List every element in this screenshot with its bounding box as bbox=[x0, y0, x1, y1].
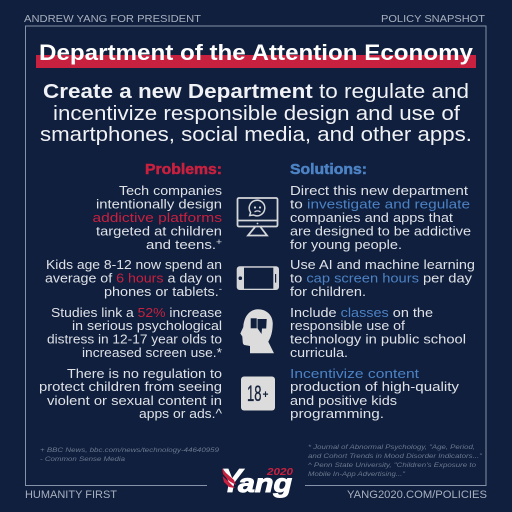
intro statement: Create a new Department to regulate and bbox=[43, 80, 469, 103]
logo: Yang 2020 bbox=[221, 462, 293, 499]
problem: addictive platforms: targeted at children bbox=[96, 224, 222, 238]
problem: psychological distress: in serious psychological bbox=[72, 318, 222, 333]
solution: investigate and regulate bbox=[290, 183, 471, 252]
solution: investigate and regulate: Direct this new department bbox=[290, 183, 468, 198]
problem: no regulation: violent or sexual content in bbox=[47, 393, 222, 408]
footnotes: right bbox=[308, 444, 483, 478]
header: campaign name: ANDREW YANG FOR PRESIDENT bbox=[24, 14, 201, 25]
problem: no regulation: apps or ads.^ bbox=[139, 406, 223, 421]
panel: problems bbox=[39, 162, 223, 421]
problem: six hours: phones or tablets. bbox=[104, 284, 209, 299]
panel: solutions bbox=[290, 162, 475, 421]
solution: investigate and regulate: to investigate and regulate bbox=[290, 196, 470, 212]
solution: cap screen hours: for children. bbox=[290, 284, 366, 299]
solution: cap screen hours: to cap screen hours per day bbox=[290, 270, 472, 286]
solution: investigate and regulate: for young people. bbox=[290, 237, 402, 252]
problem: psychological distress bbox=[47, 305, 222, 360]
icon: head with thumbs down bbox=[240, 309, 274, 353]
icon: 18+ rating bbox=[241, 376, 275, 410]
solution: investigate and regulate: companies and apps that bbox=[290, 210, 453, 225]
footnotes: right: and Cohort Trends in Mood Disorder Indicators..." bbox=[308, 453, 483, 460]
problem: addictive platforms: Tech companies bbox=[119, 183, 222, 198]
header: policy snapshot: POLICY SNAPSHOT bbox=[381, 14, 485, 25]
solution: classes: technology in public school bbox=[290, 332, 466, 346]
problem: six hours: average of 6 hours a day on bbox=[45, 270, 222, 286]
footnotes: right: * Journal of Abnormal Psychology, "Age, Period, bbox=[308, 444, 475, 451]
problem: psychological distress: increased screen use.* bbox=[82, 345, 222, 360]
title: Department of the Attention Economy bbox=[39, 40, 474, 65]
problem: psychological distress: Studies link a 52% increase bbox=[51, 305, 222, 320]
heading: problems: Problems: bbox=[145, 162, 222, 178]
solution: incentivize content: Incentivize content bbox=[290, 366, 419, 381]
problem: addictive platforms: addictive platforms bbox=[92, 210, 222, 225]
intro statement: incentivize responsible design and use of bbox=[53, 102, 460, 125]
intro statement bbox=[40, 80, 472, 146]
footnotes: right: ^ Penn State University, "Children's Exposure to bbox=[308, 462, 476, 469]
solution: classes: curricula. bbox=[290, 345, 348, 360]
solution: classes: responsible use of bbox=[290, 318, 405, 333]
solution: incentivize content: production of high-quality bbox=[290, 379, 459, 394]
footer: slogan: HUMANITY FIRST bbox=[25, 489, 117, 501]
problem: six hours: - bbox=[219, 284, 222, 294]
problem: psychological distress: distress in 12-17 year olds to bbox=[47, 332, 222, 346]
logo: Yang 2020: ang bbox=[238, 468, 292, 498]
solution: cap screen hours: Use AI and machine learning bbox=[290, 257, 475, 272]
footer: url: YANG2020.COM/POLICIES bbox=[347, 489, 487, 501]
footnotes: left: + BBC News, bbc.com/news/technology-44640959 bbox=[40, 447, 219, 454]
logo: Yang 2020: 2020 bbox=[266, 466, 293, 478]
problem: no regulation: There is no regulation to bbox=[67, 366, 222, 381]
solution: classes: Include classes on the bbox=[290, 305, 433, 320]
solution: incentivize content: and positive kids bbox=[290, 393, 397, 408]
solution: incentivize content: programming. bbox=[290, 406, 384, 421]
solution: cap screen hours bbox=[290, 257, 475, 299]
problem: addictive platforms: and teens. bbox=[146, 237, 208, 252]
heading: solutions: Solutions: bbox=[290, 162, 367, 178]
solution: investigate and regulate: are designed to be addictive bbox=[290, 224, 471, 238]
logo: Yang 2020: Y bbox=[221, 462, 245, 499]
icon: monitor with sad face bbox=[238, 198, 278, 236]
icon: 18+ rating: + bbox=[262, 389, 268, 401]
footnotes: right: Mobile In-App Advertising..." bbox=[308, 471, 406, 478]
problem: six hours: Kids age 8-12 now spend an bbox=[46, 257, 222, 272]
problem: addictive platforms bbox=[92, 183, 222, 252]
icon: smartphone bbox=[237, 266, 279, 290]
icon: 18+ rating: 18 bbox=[247, 381, 262, 406]
footnotes: left: - Common Sense Media bbox=[40, 456, 125, 463]
footnotes: left bbox=[40, 447, 219, 463]
problem: no regulation bbox=[39, 366, 223, 421]
problem: six hours bbox=[45, 257, 222, 299]
solution: classes bbox=[290, 305, 466, 360]
solution: incentivize content bbox=[290, 366, 459, 421]
problem: addictive platforms: + bbox=[216, 237, 222, 247]
intro statement: smartphones, social media, and other apps. bbox=[40, 123, 472, 146]
problem: no regulation: protect children from seeing bbox=[39, 379, 222, 394]
problem: addictive platforms: intentionally design bbox=[96, 196, 222, 212]
